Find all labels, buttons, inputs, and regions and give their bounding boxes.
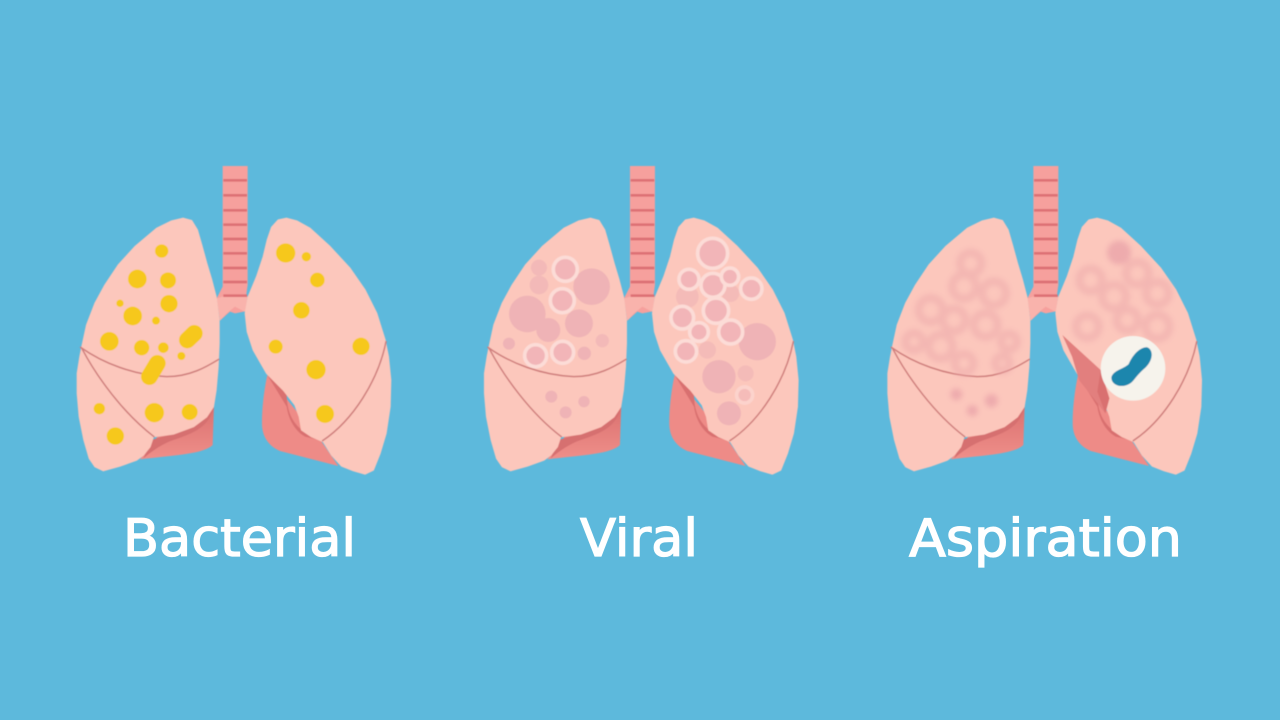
icon: blue pathogen [1111,347,1152,386]
yellow bacterial spots [94,243,370,445]
panel: bacterial lungs [77,166,391,474]
viral lesions [503,260,776,425]
heading: Viral: Viral [580,509,698,569]
viral rings [525,238,762,403]
heading: Bacterial: Bacterial [123,509,356,569]
aspiration highlight circle [1101,336,1165,401]
panel: aspiration lungs [888,166,1201,474]
faint infiltrate patches [905,241,1169,416]
panel: viral lungs [485,166,798,474]
heading: Aspiration: Aspiration [909,509,1182,569]
